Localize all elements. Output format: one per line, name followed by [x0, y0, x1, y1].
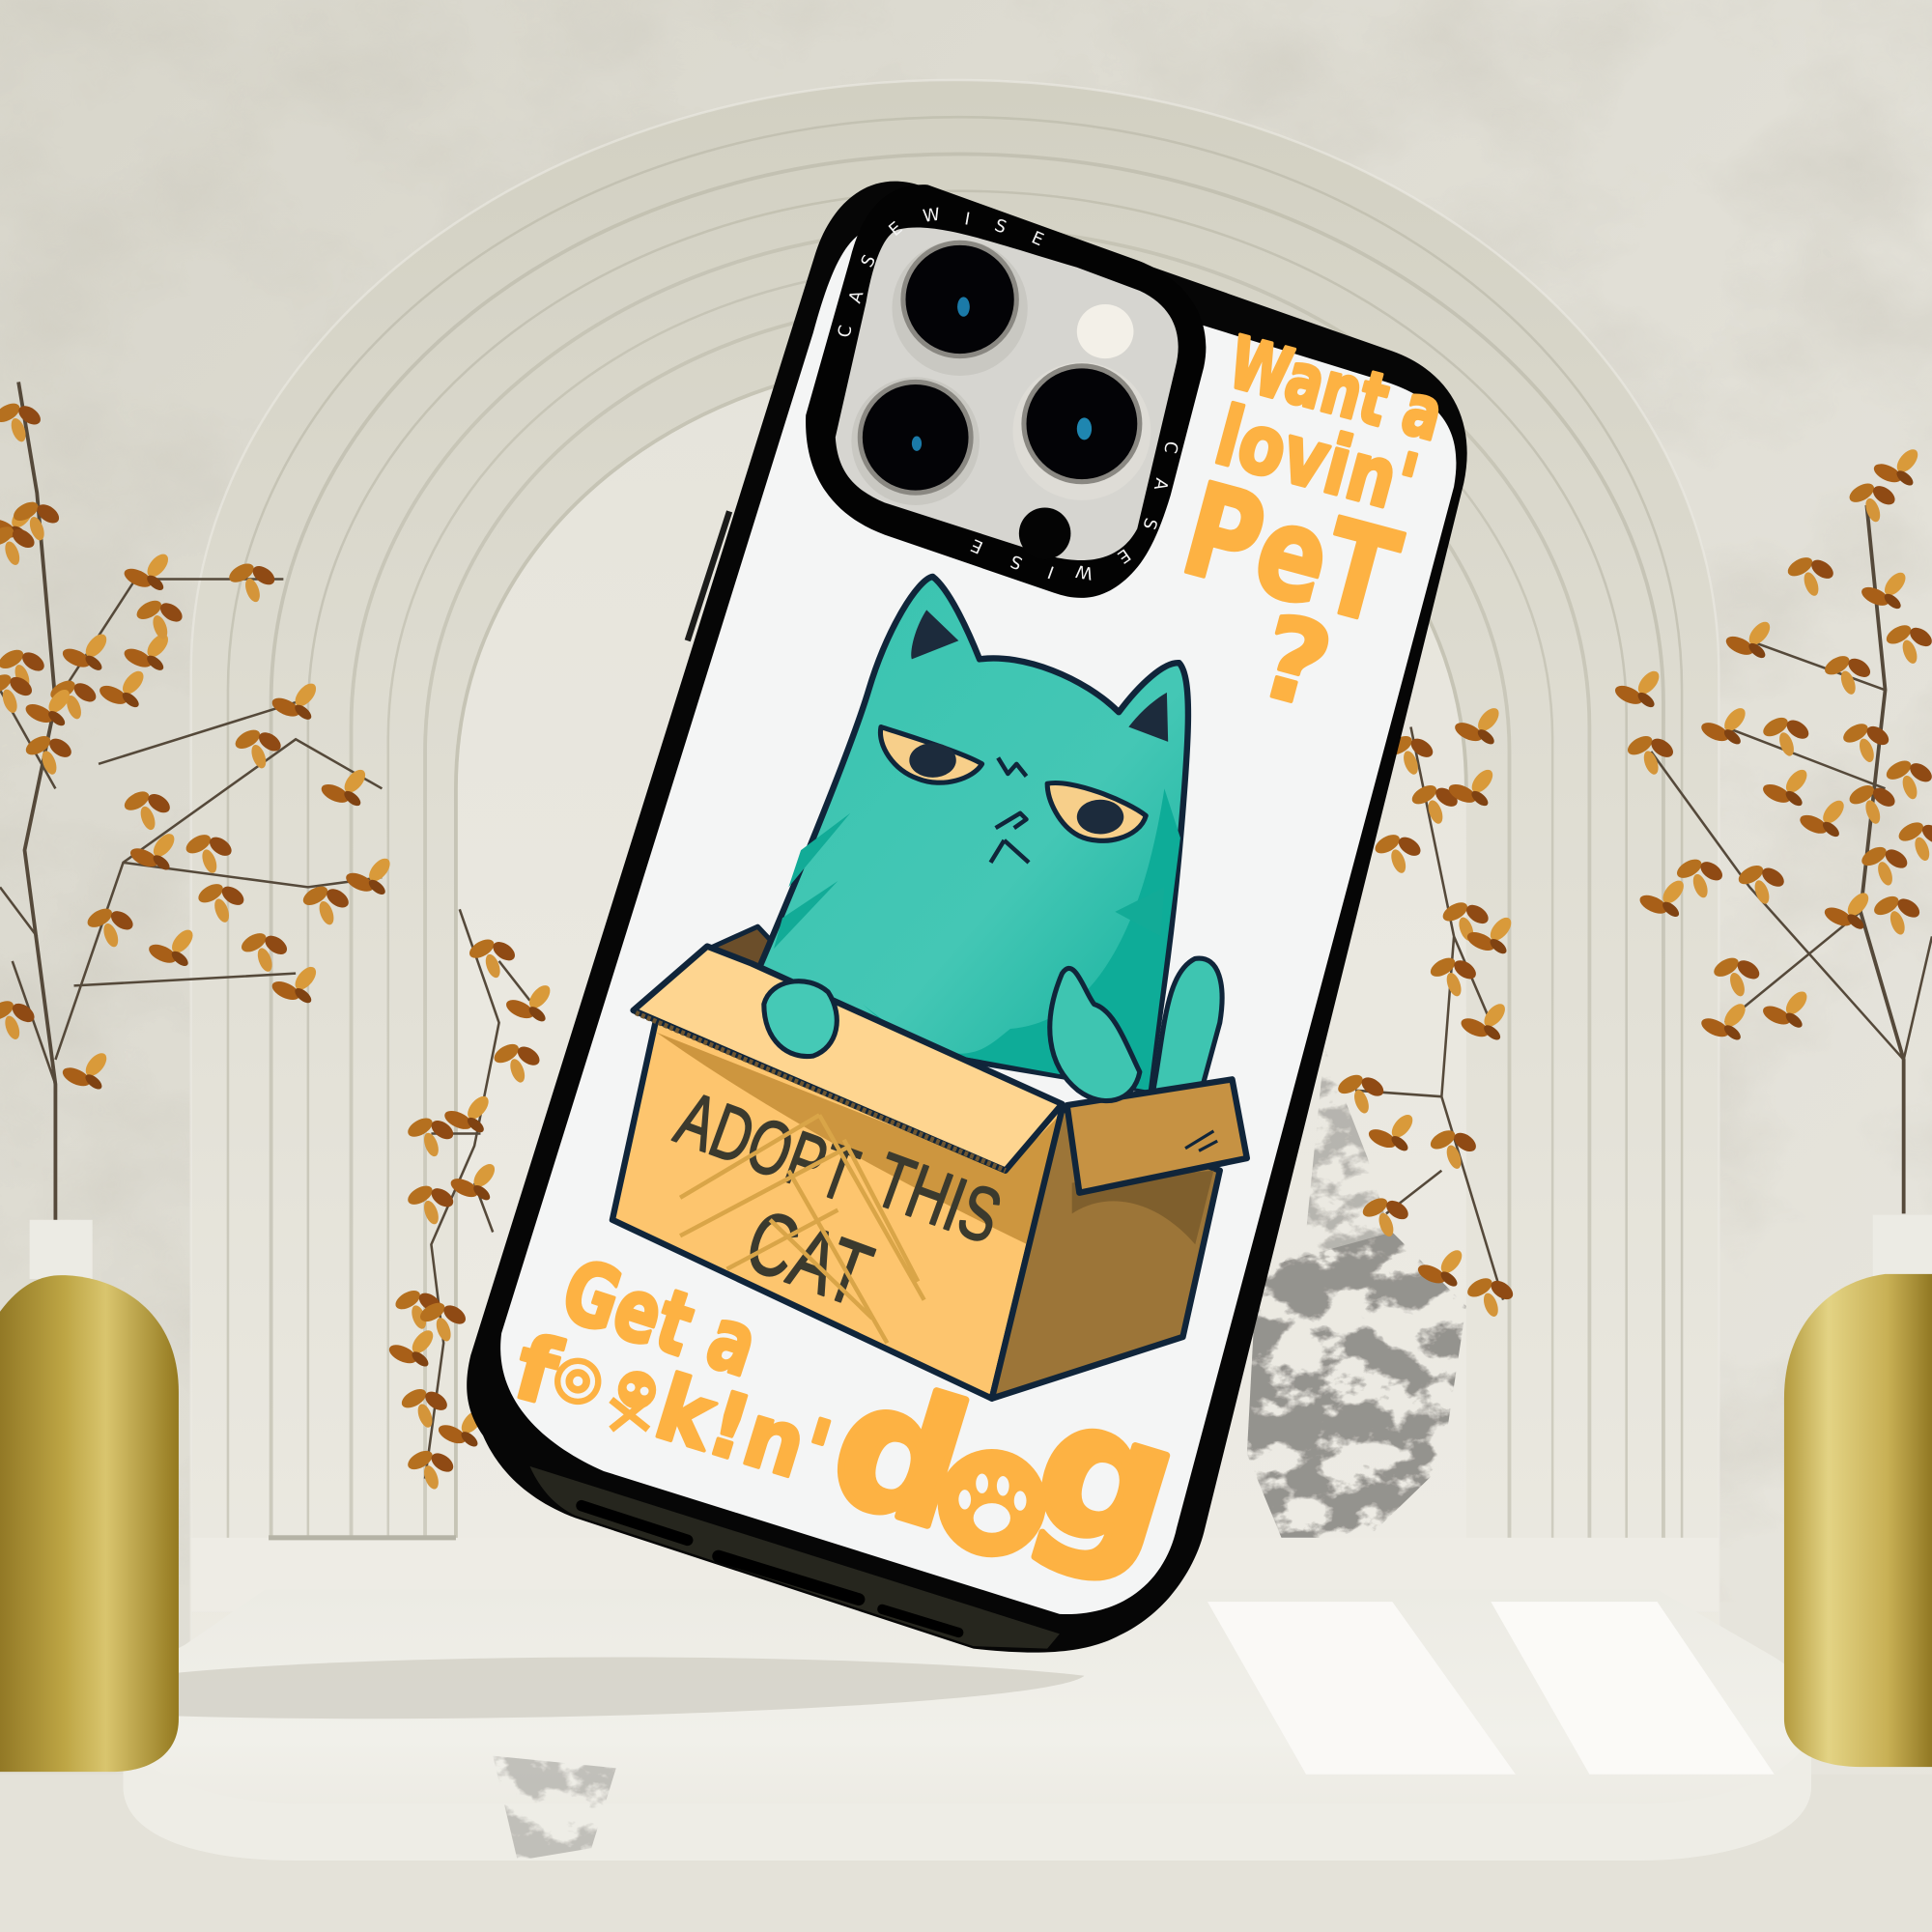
box inside — [708, 926, 813, 1010]
brand ring text — [834, 205, 1181, 583]
cat raised paw — [1050, 968, 1140, 1101]
tagline: Get a f**kin' dog: d — [810, 1341, 988, 1569]
box side face — [992, 1109, 1220, 1399]
brand ring text: A — [845, 288, 868, 305]
brow, nose, mouth — [991, 757, 1029, 863]
icon: paw print in the o — [938, 1449, 1046, 1557]
box lettering — [666, 1074, 1011, 1325]
brand ring text: C — [834, 324, 857, 339]
tagline: Get a f**kin' dog: Get a — [551, 1240, 769, 1397]
cat body — [739, 577, 1188, 1091]
box lettering: ADOPT — [666, 1074, 869, 1218]
brand ring text: S — [992, 215, 1009, 238]
stepped floor and plinth — [0, 1535, 1932, 1932]
icon: spiral — [554, 1358, 601, 1405]
tagline: Get a f**kin' dog: f — [504, 1316, 570, 1426]
brand ring text: A — [1150, 476, 1172, 493]
phone case — [467, 182, 1467, 1653]
headline: Want a lovin' PeT ?: ? — [1246, 589, 1344, 734]
tagline: Get a f**kin' dog: k!n' — [644, 1355, 842, 1506]
ears — [911, 610, 958, 659]
bottom edge band — [529, 1466, 1060, 1649]
brand ring text: W — [1074, 560, 1094, 583]
cat paw left — [764, 981, 837, 1057]
brand ring text: S — [1008, 551, 1025, 573]
headline: Want a lovin' PeT ?: PeT — [1169, 455, 1412, 654]
case body — [467, 182, 1467, 1653]
center-left branch plant — [386, 909, 554, 1492]
cat tail — [1152, 958, 1222, 1096]
arch niche — [191, 80, 1719, 1651]
cat in box illustration — [612, 577, 1247, 1399]
left gold vase — [0, 1220, 179, 1772]
scratch marks — [680, 1115, 924, 1343]
box right flap — [1067, 1079, 1247, 1193]
headline: Want a lovin' PeT ?: Want a — [1220, 321, 1451, 457]
camera island — [806, 185, 1206, 598]
brand ring text: E — [885, 218, 906, 241]
icon: skull and crossbones — [611, 1373, 654, 1430]
bottom ports — [582, 1506, 958, 1633]
box lettering: CAT — [734, 1191, 883, 1325]
left branch plant — [0, 382, 394, 1220]
brand ring text: E — [1114, 544, 1134, 567]
lens right — [1012, 362, 1151, 500]
side buttons — [688, 511, 729, 640]
right-inner branch plant — [1335, 704, 1517, 1319]
brand ring text: C — [1159, 440, 1181, 455]
lens top — [892, 241, 1028, 376]
brand ring text: E — [1029, 228, 1046, 250]
brand ring text: I — [963, 209, 972, 230]
right gold vase — [1784, 1215, 1932, 1767]
brand ring text: W — [922, 205, 942, 227]
brand ring text: S — [1138, 515, 1161, 532]
flash — [1077, 304, 1133, 358]
box front flap — [634, 947, 1062, 1171]
eyes — [880, 727, 1146, 840]
headline: Want a lovin' PeT ?: lovin' — [1207, 388, 1427, 532]
tagline: Get a f**kin' dog — [504, 1240, 1202, 1599]
lens bottom left — [851, 377, 980, 505]
marble veining in niche — [1247, 1047, 1466, 1538]
headline: Want a lovin' PeT ? — [1169, 321, 1451, 734]
box front face — [612, 1016, 1062, 1399]
box lettering: THIS — [865, 1136, 1011, 1260]
tagline: Get a f**kin' dog: g — [1012, 1354, 1202, 1599]
white back panel — [500, 227, 1456, 1614]
sensor hole — [1019, 508, 1070, 559]
right branch plant — [1612, 445, 1932, 1213]
brand ring text: I — [1045, 561, 1057, 582]
brand ring text: S — [857, 251, 880, 270]
brand ring text: E — [968, 534, 986, 557]
